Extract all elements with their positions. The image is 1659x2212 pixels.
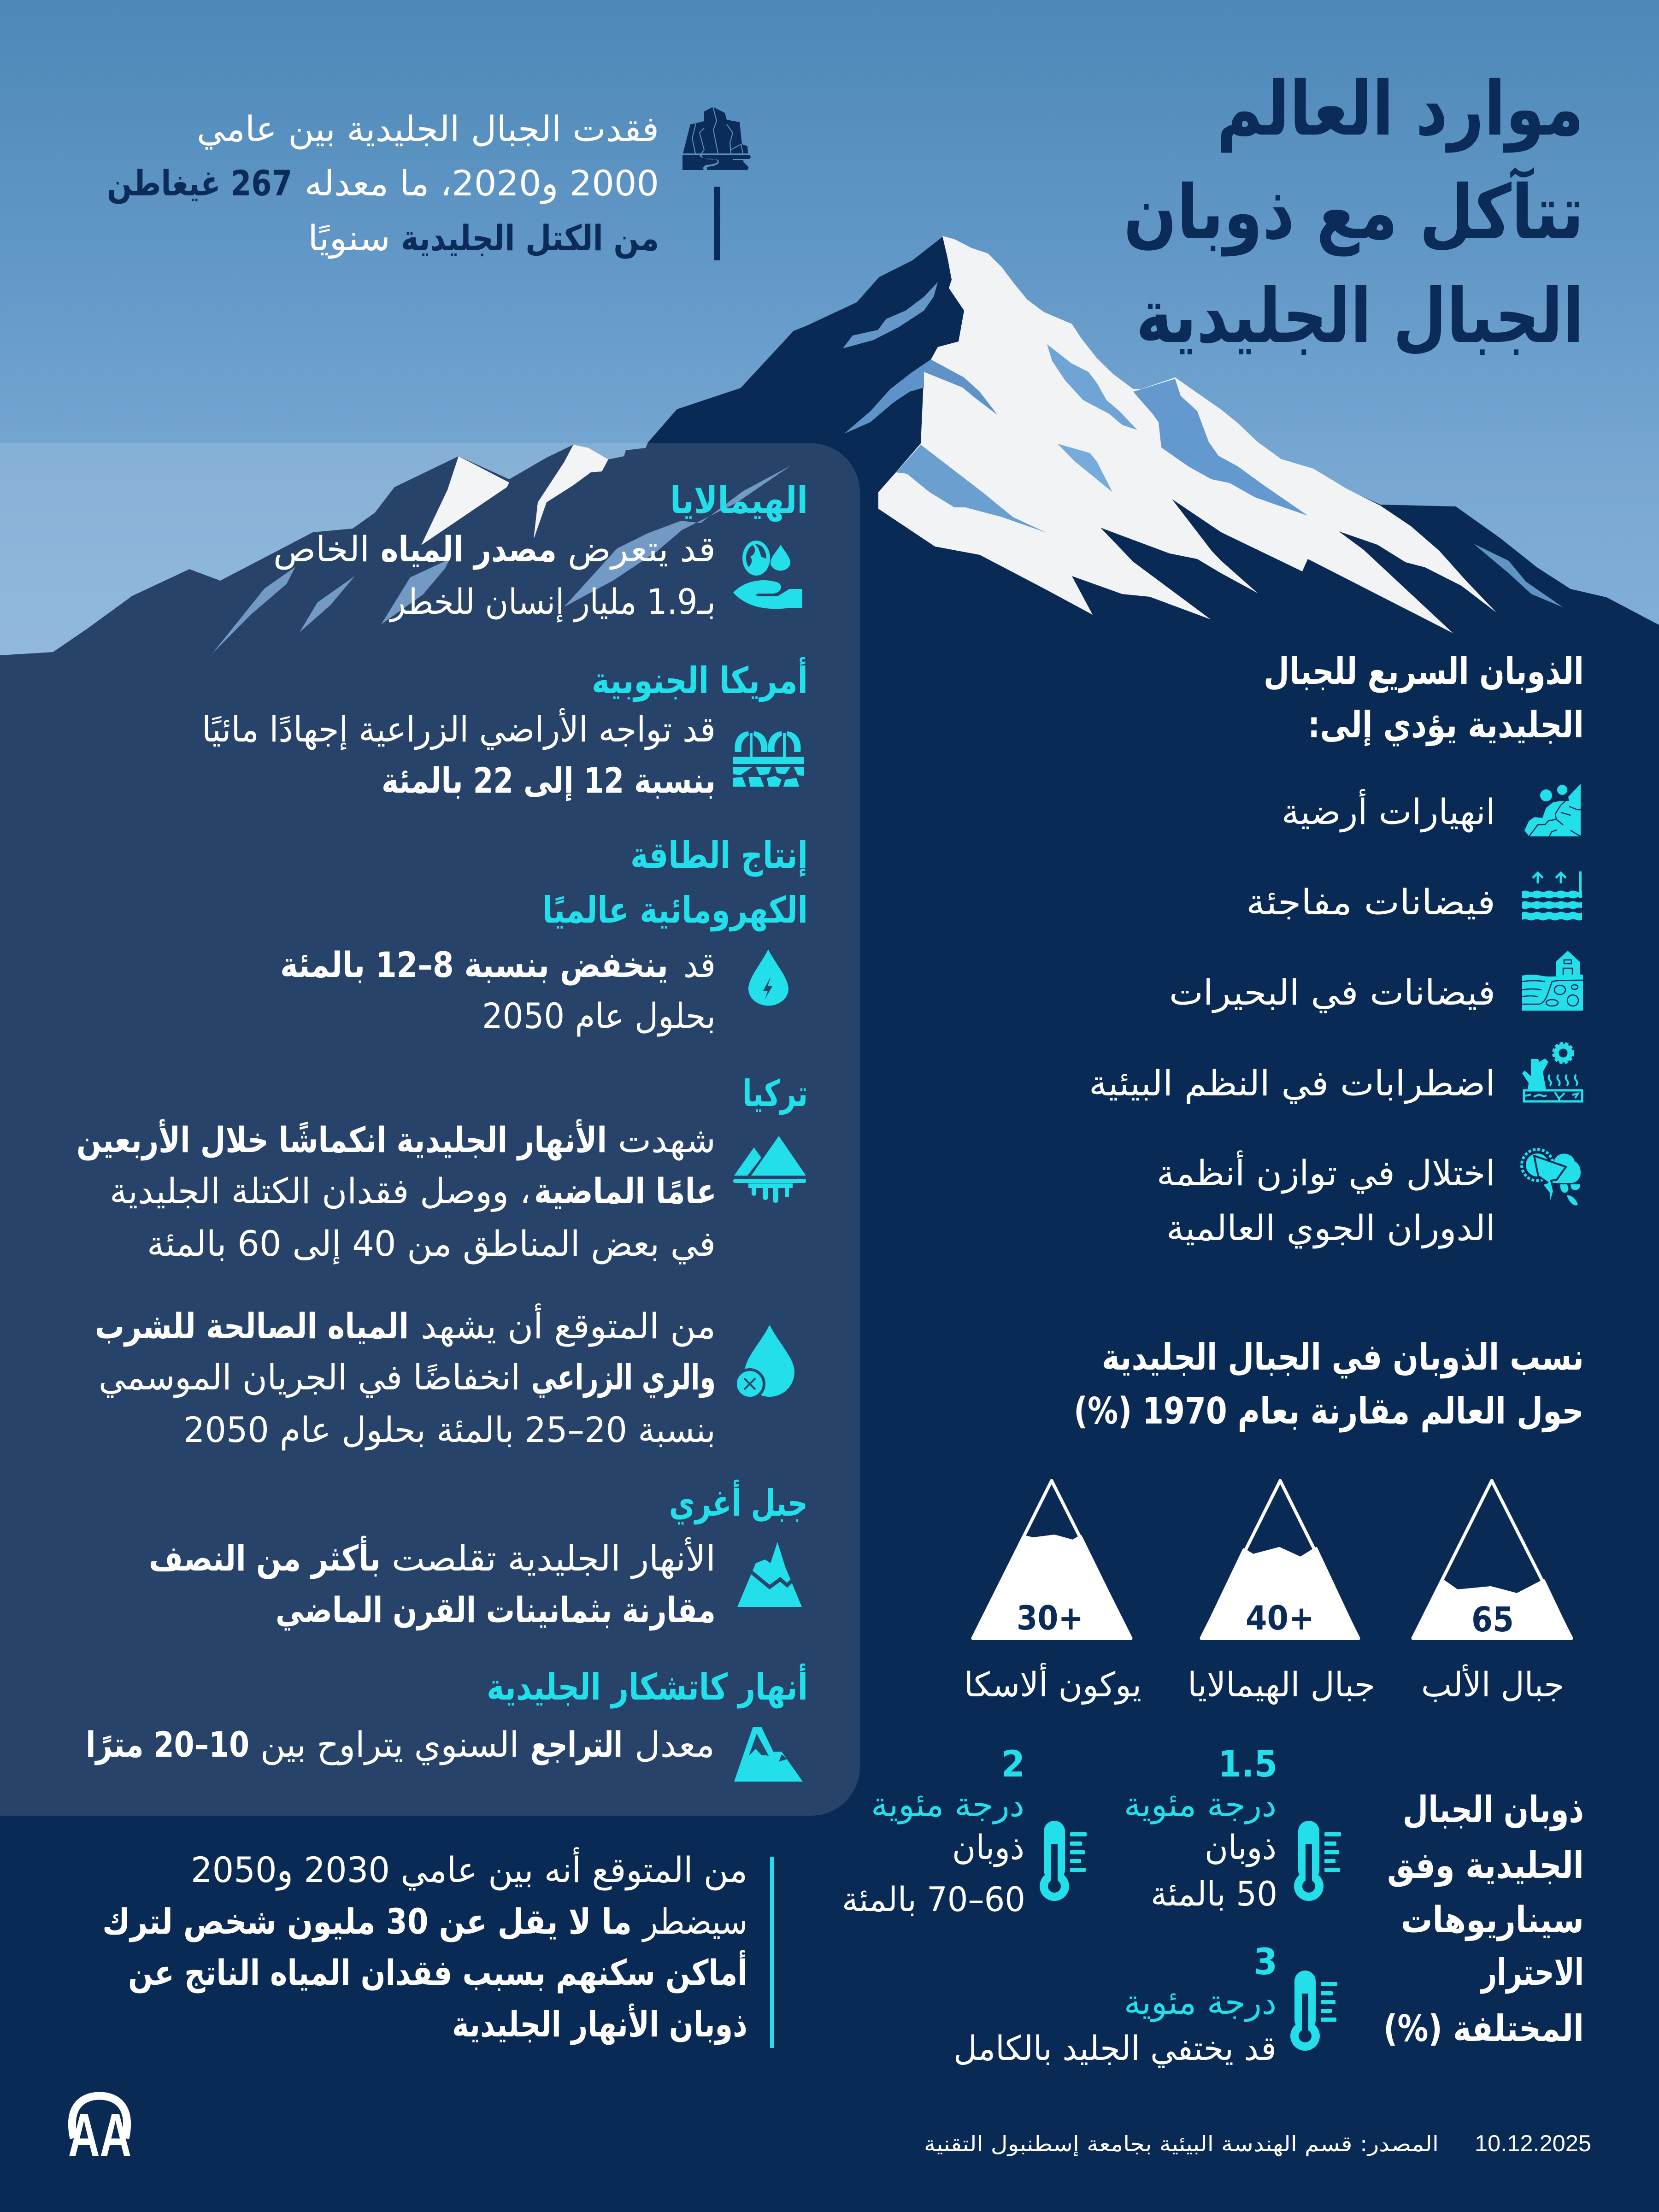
scenario: 1.5 degrees: 50 بالمئة xyxy=(1151,1875,1277,1914)
text block: ice mass loss: 2000 و2020، ما معدله xyxy=(305,163,659,204)
section: South America: قد تواجه الأراضي الزراعية إجهادًا مائيًا xyxy=(202,708,716,750)
scenario: 2 degrees: درجة مئوية xyxy=(871,1785,1024,1824)
scenario: 1.5 degrees xyxy=(1124,1744,1341,1914)
icon: melting mountains xyxy=(733,1136,806,1203)
section: South America: أمريكا الجنوبية xyxy=(592,657,808,702)
scenario: 1.5 degrees: ذوبان xyxy=(1205,1828,1277,1867)
heading: الجليدية يؤدي إلى: xyxy=(1308,704,1584,747)
section: Mount Ararat xyxy=(149,1479,808,1631)
chart: Himalayas xyxy=(1188,1481,1375,1705)
date: 10.12.2025 xyxy=(1475,2130,1591,2156)
callout: displacement: من المتوقع أنه بين عامي 2030 و2050 xyxy=(191,1847,747,1891)
chart: Himalayas: 40+ xyxy=(1246,1599,1314,1637)
section: Kackar glaciers: 10–20 مترًا xyxy=(86,1724,249,1765)
scenario: 2 degrees: ذوبان xyxy=(952,1828,1024,1867)
section: South America: بنسبة 12 إلى 22 بالمئة xyxy=(382,760,716,801)
heading xyxy=(1383,1788,1584,2050)
section: hydropower: إنتاج الطاقة xyxy=(630,834,808,877)
section: Mount Ararat: مقارنة بثمانينات القرن الماضي xyxy=(276,1589,716,1631)
text block: drinking and irrigation water xyxy=(95,1303,716,1451)
heading: سيناريوهات xyxy=(1401,1899,1584,1941)
section: Mount Ararat: جبل أغري xyxy=(669,1479,808,1524)
text block: drinking and irrigation water: والري الزراعي xyxy=(531,1357,716,1398)
section: hydropower: بحلول عام 2050 xyxy=(482,995,716,1037)
source: المصدر: قسم الهندسة البيئية بجامعة إسطنبول التقنية xyxy=(924,2131,1439,2157)
icon: drop with cross xyxy=(735,1325,794,1398)
text block: drinking and irrigation water: انخفاضًا في الجريان الموسمي xyxy=(99,1357,520,1398)
callout: displacement: أماكن سكنهم بسبب فقدان المياه الناتج عن xyxy=(128,1950,747,1994)
scenario: 1.5 degrees: 1.5 xyxy=(1218,1744,1277,1785)
scenario: 2 degrees xyxy=(842,1744,1087,1919)
icon: thermometer xyxy=(1290,1971,1337,2051)
chart: Alps xyxy=(1413,1481,1571,1705)
icon: landslide xyxy=(1524,784,1581,836)
section: Turkey: تركيا xyxy=(742,1072,808,1115)
item: landslides: انهيارات أرضية xyxy=(1282,789,1495,833)
panel: regional impacts xyxy=(0,443,860,1816)
item: atmospheric circulation imbalance: الدوران الجوي العالمية xyxy=(1166,1207,1495,1249)
section: Turkey: الأنهار الجليدية انكماشًا خلال الأربعين xyxy=(76,1119,607,1161)
icon: mountain with snow line xyxy=(737,1542,802,1607)
heading: حول العالم مقارنة بعام 1970 (%) xyxy=(1074,1390,1584,1433)
section: Kackar glaciers: أنهار كاتشكار الجليدية xyxy=(487,1663,808,1708)
heading xyxy=(1264,650,1584,747)
section: Kackar glaciers: السنوي يتراوح بين xyxy=(260,1724,519,1765)
heading: الجليدية وفق xyxy=(1387,1844,1584,1887)
section: hydropower: قد xyxy=(683,944,716,985)
icon: iceberg xyxy=(682,107,751,260)
section: Turkey xyxy=(76,1072,808,1265)
scenario: 3 degrees: 3 xyxy=(1253,1941,1277,1983)
scenario: 2 degrees: 2 xyxy=(1001,1744,1025,1785)
icon: drop with bolt xyxy=(748,949,788,1006)
heading: ذوبان الجبال xyxy=(1403,1788,1584,1831)
heading: المختلفة (%) xyxy=(1383,2007,1584,2050)
section: Mount Ararat: بأكثر من النصف xyxy=(149,1535,381,1579)
section: melt percentages xyxy=(964,1336,1584,1705)
item: atmospheric circulation imbalance: اختلال في توازن أنظمة xyxy=(1157,1150,1495,1194)
scenario: 1.5 degrees: درجة مئوية xyxy=(1124,1785,1277,1824)
icon: irrigation on cracked land xyxy=(733,731,804,787)
section: Turkey: شهدت xyxy=(618,1119,716,1161)
item: lake floods: فيضانات في البحيرات xyxy=(1169,972,1495,1013)
scenario: 2 degrees: 60–70 بالمئة xyxy=(842,1880,1025,1919)
chart: Yukon Alaska: يوكون ألاسكا xyxy=(964,1663,1141,1705)
title xyxy=(1124,66,1584,360)
title: موارد العالم xyxy=(1217,66,1584,153)
item: atmospheric circulation imbalance xyxy=(1157,1150,1495,1249)
text block: drinking and irrigation water: المياه الصالحة للشرب xyxy=(95,1306,409,1347)
chart: Himalayas: جبال الهيمالايا xyxy=(1188,1665,1375,1705)
scenario: 3 degrees: درجة مئوية xyxy=(1124,1983,1277,2022)
heading xyxy=(1074,1336,1584,1433)
section: Kackar glaciers xyxy=(86,1663,808,1765)
vertical line xyxy=(714,187,720,260)
section: South America xyxy=(202,657,808,801)
text block: ice mass loss xyxy=(107,108,659,259)
section: Kackar glaciers: معدل xyxy=(635,1724,715,1765)
icon: lake and house xyxy=(1522,951,1583,1011)
text block: ice mass loss: من الكتل الجليدية xyxy=(401,218,659,259)
text block: ice mass loss: 267 غيغاطن xyxy=(107,163,292,204)
scenario: 3 degrees xyxy=(953,1941,1337,2068)
heading: الذوبان السريع للجبال xyxy=(1264,650,1584,693)
icon: globe, drop and hand xyxy=(733,541,802,609)
background: sky xyxy=(0,0,1659,691)
section: Turkey: ، ووصل فقدان الكتلة الجليدية xyxy=(110,1171,531,1212)
section: Himalaya xyxy=(273,479,808,623)
item: flash floods: فيضانات مفاجئة xyxy=(1246,882,1495,923)
chart: Alps: 65 xyxy=(1471,1600,1514,1640)
section: hydropower: ينخفض بنسبة 8–12 بالمئة xyxy=(280,944,668,986)
icon: storm xyxy=(1522,1149,1581,1206)
section: Turkey: عامًا الماضية xyxy=(534,1171,717,1212)
section: Turkey: في بعض المناطق من 40 إلى 60 بالمئة xyxy=(147,1223,716,1265)
section: warming scenarios xyxy=(842,1744,1584,2068)
icon: ecosystem xyxy=(1522,1043,1582,1101)
icon: rising water xyxy=(1522,871,1582,921)
section: Mount Ararat: الأنهار الجليدية تقلصت xyxy=(392,1537,716,1579)
text block: ice mass loss: سنويًا xyxy=(308,218,390,259)
section: Himalaya: الخاص xyxy=(273,529,370,570)
callout: displacement: ذوبان الأنهار الجليدية xyxy=(452,2003,747,2045)
title: تتآكل مع ذوبان xyxy=(1124,167,1584,257)
text block: ice mass loss: فقدت الجبال الجليدية بين عامي xyxy=(197,108,659,150)
callout: displacement xyxy=(102,1847,774,2048)
text block: drinking and irrigation water: من المتوقع أن يشهد xyxy=(421,1303,716,1347)
section: Kackar glaciers: التراجع xyxy=(530,1724,623,1765)
callout: displacement: سيضطر xyxy=(641,1901,747,1942)
icon: thermometer xyxy=(1040,1821,1087,1901)
text block: drinking and irrigation water: بنسبة 20–25 بالمئة بحلول عام 2050 xyxy=(183,1409,716,1451)
section: Himalaya: قد يتعرض xyxy=(568,529,716,570)
section: Himalaya: بـ1.9 مليار إنسان للخطر xyxy=(388,581,716,623)
icon: thermometer xyxy=(1294,1821,1341,1901)
section: consequences of rapid melting xyxy=(1089,650,1584,1249)
scenario: 3 degrees: قد يختفي الجليد بالكامل xyxy=(953,2029,1277,2068)
callout: displacement: ما لا يقل عن 30 مليون شخص لترك xyxy=(102,1901,632,1942)
chart: Yukon Alaska: 30+ xyxy=(1017,1599,1083,1637)
section: hydropower xyxy=(280,834,808,1037)
section: Himalaya: الهيمالايا xyxy=(670,479,808,522)
heading: الاحترار xyxy=(1480,1951,1584,1994)
chart: Alps: جبال الألب xyxy=(1421,1664,1564,1705)
logo: Anadolu Agency: AA xyxy=(68,2101,131,2169)
item: ecosystem disturbances: اضطرابات في النظم البيئية xyxy=(1089,1063,1495,1104)
icon: mountain peaks xyxy=(734,1727,803,1782)
section: Himalaya: مصدر المياه xyxy=(381,529,557,570)
chart: Yukon Alaska xyxy=(964,1481,1141,1705)
logo: Anadolu Agency xyxy=(68,2096,131,2169)
section: hydropower: الكهرومائية عالميًا xyxy=(542,889,808,932)
